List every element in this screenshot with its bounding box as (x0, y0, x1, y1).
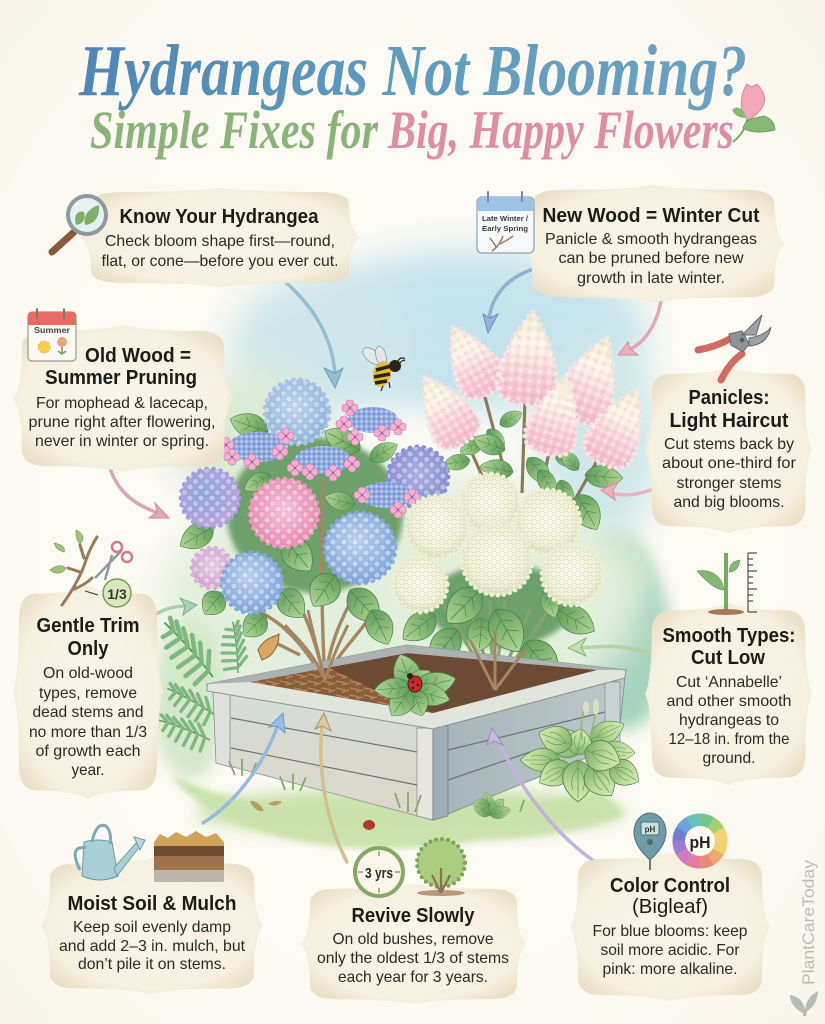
fallen leaves and ladybug (250, 634, 375, 830)
heading: Summer Pruning (45, 367, 197, 389)
heading: Smooth Types: (662, 625, 796, 647)
body: dead stems and (32, 704, 144, 721)
watercolor background wash (152, 250, 670, 849)
heading (662, 625, 796, 669)
arrow: old wood (107, 455, 169, 518)
illustration: panicle hydrangea shrub (404, 309, 660, 536)
icon: summer calendar (28, 309, 76, 361)
panel: know your hydrangea (52, 188, 360, 287)
icon: pH color wheel: pH (690, 833, 710, 852)
body (317, 931, 509, 986)
body (102, 233, 338, 270)
heading: Know Your Hydrangea (120, 206, 319, 228)
heading: Light Haircut (670, 410, 789, 432)
icon: winter calendar (477, 192, 534, 253)
icon: pH meter (634, 813, 666, 870)
body: and other smooth (666, 693, 792, 710)
leaves (395, 579, 601, 690)
icon: three year clock (355, 848, 403, 896)
body: pink: more alkaline. (602, 961, 738, 978)
subtitle pink: Big, Happy Flowers (387, 100, 734, 160)
heading: Gentle Trim (36, 615, 140, 637)
icon: watering can (75, 825, 145, 880)
illustration: smooth hydrangea shrub (393, 474, 602, 690)
icon: soil layers (154, 831, 224, 882)
body: Check bloom shape first—round, (105, 233, 335, 250)
icon: branch with scissors and one-third badge: 1/3 (107, 586, 127, 602)
panel: new wood (477, 185, 785, 302)
body: and big blooms. (674, 494, 784, 511)
arrows (107, 266, 667, 865)
body: flat, or cone—before you ever cut. (102, 253, 338, 270)
heading: Color Control (610, 875, 730, 897)
posts (213, 692, 230, 767)
watermark (790, 859, 818, 1016)
icon: pH meter: pH (645, 825, 656, 834)
body: types, remove (39, 685, 137, 702)
icon: ladybug (407, 673, 422, 692)
leaves (174, 408, 402, 650)
icon: pruners (698, 315, 771, 380)
arrow: gentle trim (147, 598, 197, 620)
left face (214, 690, 433, 820)
inner rim shade (207, 645, 626, 684)
heading (610, 875, 730, 918)
panicle blooms (404, 309, 660, 474)
grass tufts (229, 759, 524, 815)
heading: (Bigleaf) (632, 896, 708, 918)
panel: smooth types (645, 553, 812, 785)
arrow: new wood to panicle (483, 266, 545, 333)
body: Cut stems back by (664, 436, 794, 453)
body (662, 436, 797, 511)
body (28, 395, 216, 450)
watermark: PlantCareToday (799, 859, 818, 985)
foliage mass (227, 437, 403, 593)
body: can be pruned before new (558, 250, 744, 267)
mulch (250, 668, 433, 713)
body: each year for 3 years. (338, 969, 488, 986)
panel: revive slowly (301, 839, 526, 1004)
panel: panicles (645, 315, 812, 533)
body: Cut ‘Annabelle’ (676, 674, 782, 691)
panel: moist soil and mulch (41, 825, 263, 994)
icon: summer calendar: Summer (34, 326, 70, 335)
icon: seedling with ruler (697, 553, 757, 615)
body: On old-wood (43, 665, 133, 682)
body: and add 2–3 in. mulch, but (59, 938, 246, 955)
stem bases above soil (285, 610, 525, 690)
body: Keep soil evenly damp (73, 919, 231, 936)
icon: pH color wheel (679, 820, 721, 862)
body: soil more acidic. For (600, 942, 740, 959)
body (29, 665, 147, 779)
body: For mophead & lacecap, (36, 395, 208, 412)
stems (440, 600, 555, 690)
body: On old bushes, remove (332, 931, 494, 948)
body: 12–18 in. from the (668, 731, 790, 748)
body (545, 231, 757, 287)
heading: Panicles: (688, 387, 770, 409)
body: For blue blooms: keep (592, 923, 748, 940)
body: hydrangeas to (679, 712, 779, 729)
illustration: hosta plant (520, 699, 645, 804)
panel: old wood (13, 309, 233, 472)
panel: gentle trim (13, 530, 163, 799)
body: don’t pile it on stems. (78, 956, 226, 973)
stems (255, 480, 375, 680)
icon: magnifying glass (52, 196, 106, 252)
icon: bee (360, 344, 405, 391)
lacecap blooms (218, 400, 420, 518)
white blooms (393, 474, 602, 612)
heading: Moist Soil & Mulch (68, 893, 236, 915)
arrow: smooth types (568, 638, 667, 662)
body: ground. (702, 750, 756, 767)
arrow: know your hydrangea (277, 275, 343, 388)
icon: pink flower sprig (732, 84, 775, 142)
heading (45, 345, 197, 389)
heading: Only (68, 638, 109, 660)
illustration: wooden raised bed (207, 645, 626, 820)
illustration: fern (145, 616, 257, 752)
icon: bush (417, 839, 465, 896)
body: growth in late winter. (577, 270, 725, 287)
body (666, 674, 792, 767)
foliage mass (428, 563, 572, 647)
icon: branch with scissors and one-third badge (50, 530, 132, 607)
heading: New Wood = Winter Cut (542, 205, 760, 227)
icon: winter calendar: Late Winter / (482, 214, 529, 223)
leaves (442, 406, 624, 536)
body: no more than 1/3 (29, 724, 147, 741)
body (59, 919, 246, 973)
heading: Cut Low (691, 647, 765, 669)
arrow: panicles (601, 482, 665, 500)
right face (433, 677, 625, 820)
illustration: bigleaf hydrangea shrub (174, 380, 448, 680)
soil (250, 653, 597, 713)
subtitle green: Simple Fixes for (90, 100, 379, 160)
body: Panicle & smooth hydrangeas (545, 231, 757, 248)
stems (463, 397, 605, 503)
arrow: new wood pink (618, 290, 662, 355)
heading (670, 387, 789, 432)
body: stronger stems (676, 475, 782, 492)
body: prune right after flowering, (28, 414, 216, 431)
illustration: small ground plant (471, 791, 512, 821)
body (592, 923, 748, 978)
icon: three year clock: 3 yrs (365, 865, 393, 882)
icon: winter calendar: Early Spring (482, 224, 528, 233)
arrow: color control (487, 728, 600, 865)
heading: Old Wood = (85, 345, 191, 367)
arrow: revive (315, 713, 347, 862)
rim (207, 645, 626, 729)
plank lines (231, 712, 605, 785)
body: year. (72, 762, 104, 779)
illustration: center plant with ladybug (374, 650, 459, 723)
body: only the oldest 1/3 of stems (317, 950, 509, 967)
mophead blooms (181, 380, 448, 613)
panel: color control (570, 813, 770, 1001)
body: of growth each (36, 743, 140, 760)
body: never in winter or spring. (35, 433, 209, 450)
heading: Revive Slowly (352, 905, 475, 927)
arrow: moist soil (203, 713, 285, 823)
heading (36, 615, 140, 660)
body: about one-third for (662, 455, 797, 472)
title (78, 30, 775, 160)
